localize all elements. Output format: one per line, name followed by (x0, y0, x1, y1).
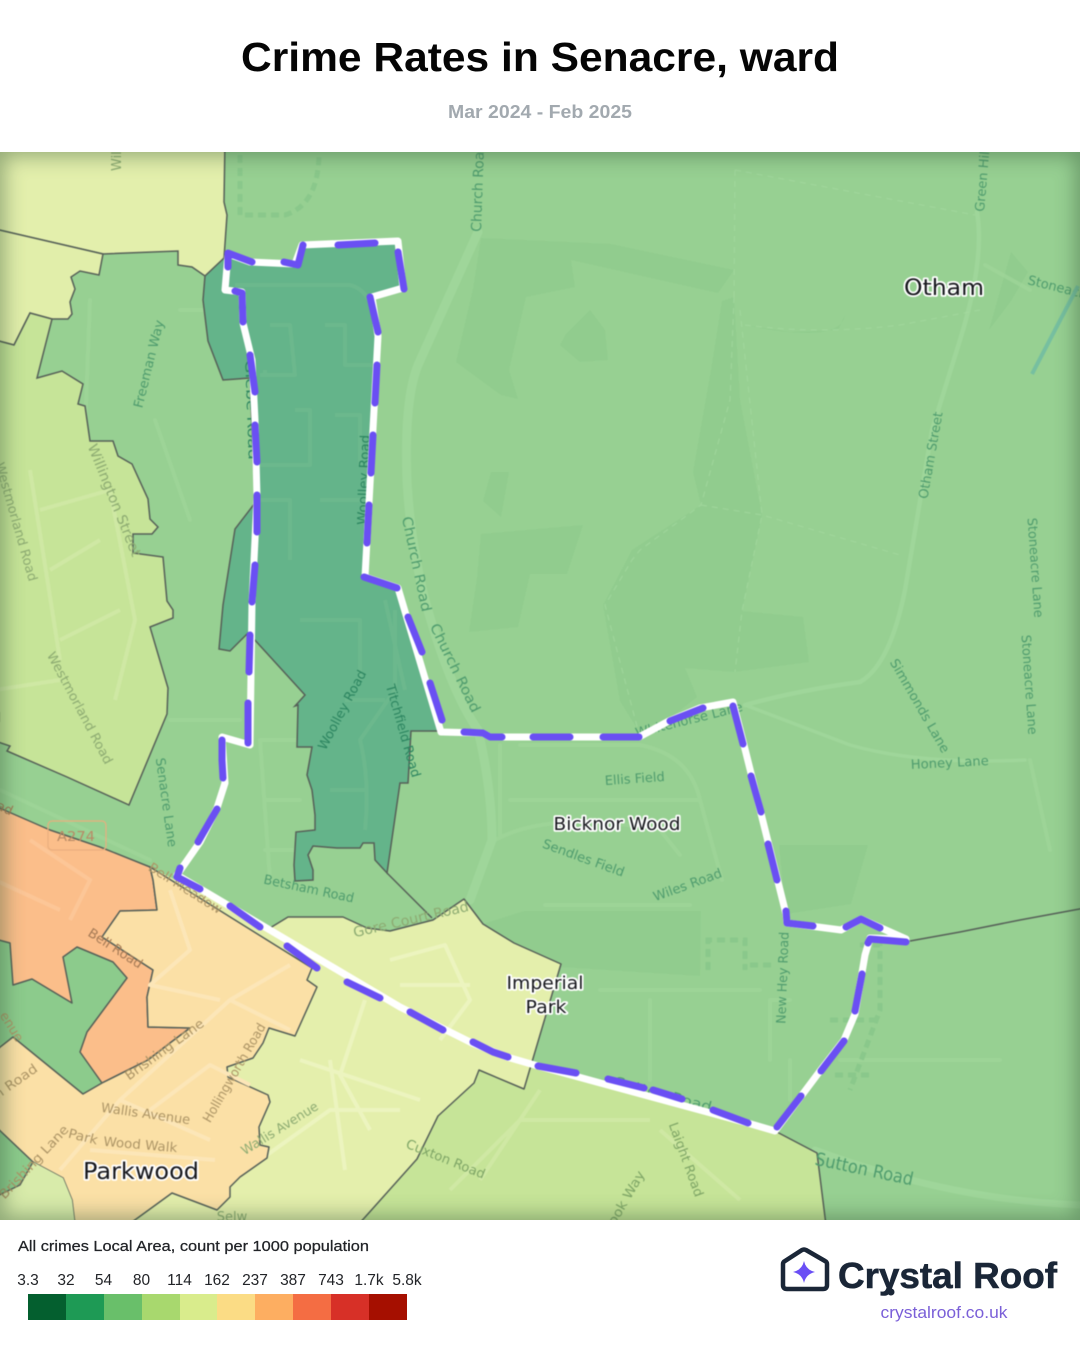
region: south-west corner green (0, 1135, 34, 1196)
legend scale values: 114 (167, 1272, 192, 1289)
title: Crime Rates in Senacre, ward (241, 34, 839, 80)
region: west green wedge (0, 940, 127, 1094)
streets on cream (60, 890, 290, 1170)
place name: Imperial Park (506, 973, 584, 1018)
road name labels: Cuxton Road (404, 1137, 487, 1182)
road: A274 shield (48, 821, 106, 850)
legend scale values: 54 (95, 1272, 112, 1289)
road name labels: Willington Street (84, 442, 144, 560)
roads on base green (1004, 274, 1020, 286)
road name labels: Church Road (426, 621, 483, 715)
region: west pale yellow (0, 229, 103, 345)
streets on pale regions (260, 945, 470, 1170)
road name labels: Sendles Field (540, 837, 626, 880)
road name labels: Wallis Avenue (239, 1099, 321, 1159)
woodland and field patches (456, 238, 1028, 976)
logo key dot (888, 1288, 894, 1296)
road name labels: Wood Walk (103, 1135, 178, 1156)
legend (17, 1238, 422, 1320)
legend scale values: 387 (280, 1272, 306, 1289)
road name labels: ook Way (605, 1168, 649, 1228)
road name labels: Betsham Road (262, 873, 355, 906)
road name labels: Stoneacre Lane (1018, 634, 1039, 735)
road name labels: Westmorland Road (43, 650, 115, 767)
road name labels: Stoneacre Lane (1024, 517, 1045, 618)
road name labels: Willington (110, 106, 125, 171)
road name labels: Otham Street (917, 411, 947, 500)
road name labels: Wiles Road (651, 866, 724, 905)
road name labels: Freeman Way (131, 318, 168, 410)
road name labels: Titchfield Road (382, 682, 423, 779)
water channel (1032, 286, 1078, 374)
road name labels: Laight Road (665, 1121, 706, 1199)
region: south light green (358, 1064, 826, 1225)
legend colour bar (28, 1294, 407, 1320)
map edge vignette (0, 152, 1080, 1220)
road name labels: Glebe Road (241, 360, 260, 460)
road name labels: Bell Meadow (145, 860, 225, 918)
legend scale values: 3.3 (17, 1272, 39, 1289)
date range subtitle: Mar 2024 - Feb 2025 (448, 101, 632, 122)
icon: star (793, 1261, 815, 1283)
region: Imperial Park pale yellow (136, 872, 560, 1220)
region: south-west corner light green (0, 1162, 75, 1225)
place name: Imperial Park: Park (526, 997, 567, 1018)
website url: crystalroof.co.uk (880, 1304, 1008, 1322)
legend scale values: 162 (204, 1272, 230, 1289)
legend scale values (17, 1272, 422, 1289)
ward boundary: purple dashes (177, 243, 906, 1127)
legend scale values: 1.7k (354, 1272, 384, 1289)
road name labels: Wallis Avenue (100, 1101, 191, 1128)
road name labels: Park (66, 1127, 100, 1149)
logo wordmark: Crystal Roof (838, 1255, 1058, 1296)
legend scale values: 237 (242, 1272, 268, 1289)
place name: Imperial Park: Imperial (506, 973, 584, 994)
road name labels: Sutton Road (613, 1074, 713, 1116)
place name: Parkwood: Parkwood (83, 1159, 199, 1185)
streets inside dark green region (235, 285, 405, 830)
road name labels: Whitehorse Lane (634, 700, 744, 741)
road name labels: Church Road (398, 515, 434, 613)
road name labels: Ellis Field (604, 770, 665, 789)
road: A274 shield: A274 (57, 830, 95, 845)
road name labels: Senacre Lane (152, 757, 179, 848)
place name: Otham: Otham (904, 276, 984, 301)
region boundaries south (270, 873, 1080, 1225)
logo (783, 1250, 1058, 1322)
footpath pattern: top and east paths (240, 155, 880, 1090)
road name labels: Hollingworth Road (200, 1021, 269, 1125)
icon: house outline (783, 1250, 827, 1289)
road name labels: New Hey Road (774, 932, 793, 1024)
legend scale values: 743 (318, 1272, 344, 1289)
region: north-west pale yellow (0, 140, 227, 276)
region: Parkwood cream (0, 867, 317, 1225)
road name labels: Gore Court Road (352, 899, 470, 941)
road name labels: Church Road (469, 143, 488, 232)
road name labels: Sutton Road (813, 1149, 915, 1190)
region: orange high crime (0, 806, 190, 1083)
region: senacre dark green (203, 241, 441, 881)
road name labels: Woolley Road (355, 435, 374, 525)
legend scale values: 5.8k (392, 1272, 422, 1289)
ward boundary: white casing (177, 241, 906, 1131)
road name labels: Bell Road (85, 926, 145, 972)
legend scale values: 32 (57, 1272, 75, 1289)
dashed footpaths (605, 300, 836, 726)
road name labels: Woolley Road (316, 668, 370, 753)
road name labels: Honey Lane (910, 754, 989, 773)
legend scale values: 80 (133, 1272, 150, 1289)
region: Westmorland light green (0, 313, 173, 805)
road name labels: Simmonds Lane (886, 657, 952, 756)
road name labels: Brishing Lane (123, 1016, 207, 1084)
legend title: All crimes Local Area, count per 1000 population (18, 1238, 369, 1255)
road name labels: Selw (217, 1210, 248, 1225)
place name: Bicknor Wood: Bicknor Wood (554, 814, 680, 835)
road name labels: Green Hill (973, 147, 994, 212)
